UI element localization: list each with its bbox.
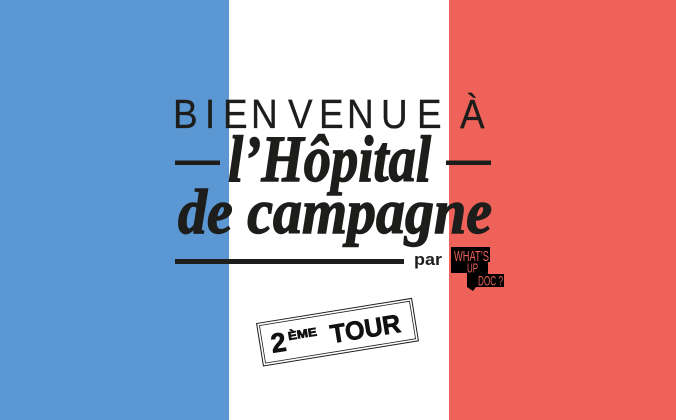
- stamp text: 2: [269, 327, 288, 359]
- logo: What's Up Doc: [451, 247, 504, 291]
- stamp text: TOUR: [328, 308, 403, 349]
- logo wordmark: [454, 248, 503, 288]
- rule: under title: [175, 259, 404, 264]
- stamp outer frame: [257, 298, 418, 366]
- panel: white flag stripe: [229, 0, 449, 420]
- panel: blue flag stripe: [0, 0, 229, 420]
- logo wordmark: UP: [467, 260, 478, 276]
- logo wordmark: WHAT’S: [454, 248, 489, 265]
- stamp inner frame: [259, 301, 416, 363]
- stamp text: ÈME: [287, 326, 318, 343]
- text: par: par: [414, 250, 442, 269]
- stamp: 2ème tour: [257, 298, 418, 366]
- rule: right of title: [446, 160, 491, 165]
- title: l'Hôpital: l’Hôpital: [228, 123, 432, 196]
- stamp text: [269, 308, 403, 359]
- logo wordmark: DOC ?: [478, 272, 503, 288]
- heading: Bienvenue à: BIENVENUE À: [173, 92, 485, 137]
- rule: left of title: [175, 160, 220, 165]
- panel: red flag stripe: [449, 0, 676, 420]
- title: de campagne: de campagne: [178, 176, 492, 247]
- logo speech bubble: [451, 247, 504, 291]
